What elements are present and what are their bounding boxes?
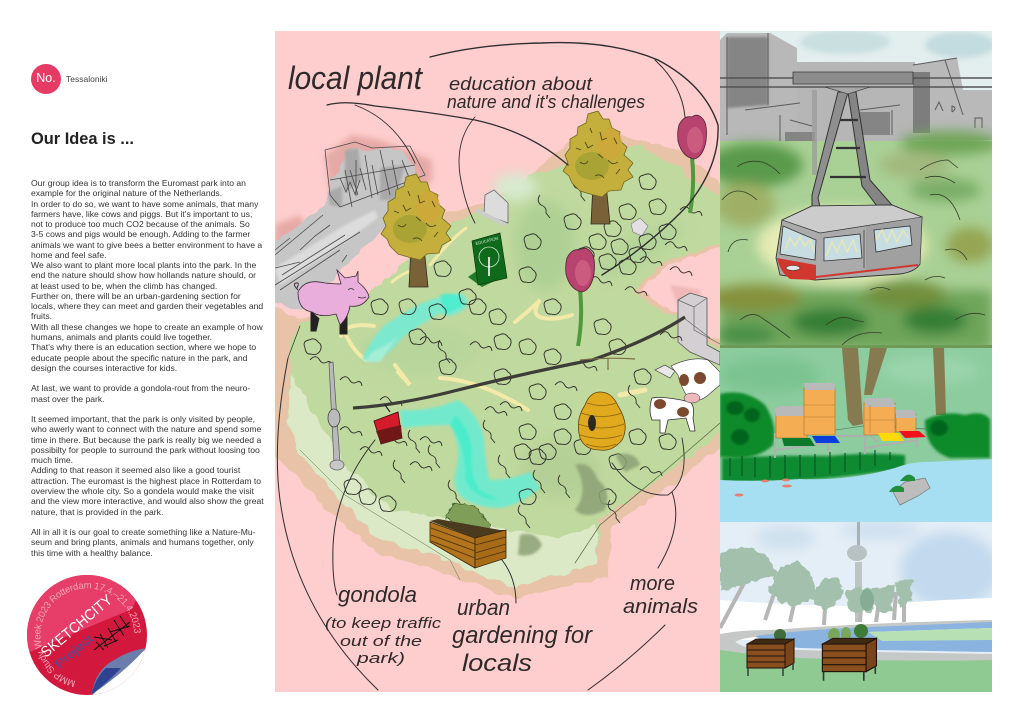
handwritten label: more animals: animals xyxy=(623,596,698,618)
body text: In order to do so, we want to have some animals, that many xyxy=(31,199,258,209)
education sign: EDUCATION xyxy=(475,235,499,246)
body text: Further on, there will be an urban-gardening section for xyxy=(31,291,241,301)
handwritten label: gondola: park) xyxy=(356,650,405,667)
rock with ducks xyxy=(889,475,930,505)
sticker ring text xyxy=(40,588,134,681)
tulip centre xyxy=(566,248,594,346)
pig xyxy=(294,270,369,334)
sketchcity wordmark: SKETCHCITY xyxy=(38,591,116,661)
body text: who awerly want to connect with the nature and spend some xyxy=(31,424,261,434)
body text: overview the whole city. So a gondela would make the visit xyxy=(31,486,254,496)
body text: locals, where they can meet and garden their vegetables and xyxy=(31,301,263,311)
handwritten label: gondola: gondola xyxy=(338,582,417,607)
body text: We also want to plant more local plants into the park. In the xyxy=(31,260,256,270)
handwritten label: urban gardening: gardening for xyxy=(452,622,593,649)
panel: euromast and planters xyxy=(720,522,992,692)
body text: With all these changes we hope to create an example of how xyxy=(31,322,263,332)
planter crate xyxy=(430,503,506,568)
handwritten label: education: nature and it's challenges xyxy=(447,92,645,112)
red gondola xyxy=(374,405,402,444)
body text: at least used to be, when the climb has changed. xyxy=(31,281,217,291)
handwritten label: local plant: local plant xyxy=(288,60,423,96)
body text: mast over the park. xyxy=(31,394,105,404)
water stream xyxy=(362,293,540,508)
pink background xyxy=(275,31,720,692)
dark bush shadows xyxy=(518,454,640,556)
body text xyxy=(31,178,264,558)
body text: It seemed important, that the park is only visited by people, xyxy=(31,414,255,424)
reeds band xyxy=(722,454,905,482)
cabin xyxy=(776,205,922,280)
grass backdrop xyxy=(720,345,992,495)
green meadow xyxy=(720,141,992,348)
body text: time in there. But because the park is really big we needed a xyxy=(31,435,261,445)
beehive xyxy=(578,358,635,450)
gondola tower xyxy=(328,362,344,470)
small building top xyxy=(476,190,508,225)
hill strokes xyxy=(722,160,985,345)
light lower rim xyxy=(288,375,597,588)
body text: possibilty for people to surround the park without loosing too xyxy=(31,445,260,455)
city buildings xyxy=(720,33,992,160)
lawn xyxy=(720,650,992,692)
body text: Our group idea is to transform the Euromast park into an xyxy=(31,178,246,188)
body text: farmers have, like cows and piggs. But it's important to us, xyxy=(31,209,252,219)
handwritten label: urban gardening: urban xyxy=(457,595,510,620)
panel: gondola view xyxy=(278,31,992,688)
handwritten label: more animals: more xyxy=(630,573,675,595)
title: Our Idea is ... xyxy=(31,130,134,148)
lily pads xyxy=(734,479,792,496)
body text: educate people about the specific nature in the park, and xyxy=(31,353,247,363)
handwritten label: urban gardening xyxy=(452,595,593,677)
path and pond xyxy=(720,620,992,661)
handwritten label: gondola: (to keep traffic xyxy=(325,615,442,632)
hive blue xyxy=(804,383,840,443)
handwritten label: education: education about xyxy=(449,74,593,94)
tulip right xyxy=(678,115,706,213)
handwritten label: urban gardening: locals xyxy=(462,650,532,677)
planter right xyxy=(822,624,876,681)
body text: That's why there is an education section, where we hope to xyxy=(31,342,256,352)
body text: animals we want to give bees a better environment to have a xyxy=(31,240,262,250)
handwritten label: more animals xyxy=(623,573,698,618)
body text: humans, animals and plants could live together. xyxy=(31,332,212,342)
body text: At last, we want to provide a gondola-rout from the neuro- xyxy=(31,383,250,393)
handwritten label: education xyxy=(447,74,645,112)
cow xyxy=(650,359,720,433)
hive yellow xyxy=(864,398,904,441)
body text: All in all it is our goal to create something like a Nature-Mu- xyxy=(31,527,256,537)
path lines xyxy=(780,425,940,438)
peeled corner xyxy=(91,648,146,695)
body text: 3-5 cows and pigs would be enough. Adding to the farmer xyxy=(31,229,250,239)
small cube xyxy=(631,218,648,236)
white ground xyxy=(720,598,992,640)
team name: Tessaloniki xyxy=(66,74,108,84)
hive green xyxy=(775,406,815,446)
body text: and the view more interactive, and would also show the great xyxy=(31,496,264,506)
body text: seum and bring plants, animals and humans together, only xyxy=(31,537,254,547)
left bush xyxy=(720,392,774,458)
building right xyxy=(670,285,720,365)
body text: design the courses interactive for kids. xyxy=(31,363,177,373)
handwritten label: gondola xyxy=(325,582,442,667)
tree right xyxy=(563,111,633,224)
cables xyxy=(720,78,992,87)
annotation curves xyxy=(277,43,720,690)
tree row xyxy=(720,548,913,628)
body text: Adding to that reason it seemed also like a good tourist xyxy=(31,465,240,475)
body text: nature, that is provided in the park. xyxy=(31,506,163,516)
bush scribbles xyxy=(304,174,702,528)
yellow paths xyxy=(341,228,645,410)
body text: this time with a healthy balance. xyxy=(31,548,153,558)
panel: beehives by the pond xyxy=(720,345,992,522)
gondola cable xyxy=(353,317,685,408)
euromast xyxy=(847,522,867,622)
water xyxy=(720,459,992,522)
body text: much time. xyxy=(31,455,73,465)
hive red xyxy=(896,410,926,438)
sketch scribble xyxy=(94,616,130,650)
sky xyxy=(720,522,992,692)
tree trunks xyxy=(842,348,946,426)
body text: example for the original nature of the Netherlands. xyxy=(31,188,222,198)
handwritten label: gondola: out of the xyxy=(340,633,422,650)
sticker: SketchCity project: MMP Study Week 2023 Rotterdam 17.4.–21.4.2023 xyxy=(34,582,141,688)
badge: No.: No. xyxy=(36,71,56,85)
planter left xyxy=(747,629,794,676)
body text: end the nature should show how hollands nature should, or xyxy=(31,270,256,280)
body text: attraction. The euromast is the highest place in Rotterdam to xyxy=(31,476,261,486)
park ground: peach border xyxy=(265,135,730,598)
right bush xyxy=(925,413,990,458)
project wordmark: Project xyxy=(52,631,96,671)
tree left xyxy=(381,174,451,287)
park ground: green xyxy=(288,145,730,588)
education sign xyxy=(468,233,507,287)
reeds xyxy=(730,450,890,478)
badge: No. xyxy=(31,64,61,94)
sky xyxy=(720,31,992,151)
panel: main park sketch xyxy=(275,31,986,692)
grey city block xyxy=(265,135,432,310)
green shading xyxy=(360,173,690,500)
body text: home and feel safe. xyxy=(31,250,106,260)
body text: fruits. xyxy=(31,311,52,321)
body text: not to produce too much CO2 because of the animals. So xyxy=(31,219,250,229)
gondola tower xyxy=(793,72,913,210)
beehive stands xyxy=(775,432,917,458)
